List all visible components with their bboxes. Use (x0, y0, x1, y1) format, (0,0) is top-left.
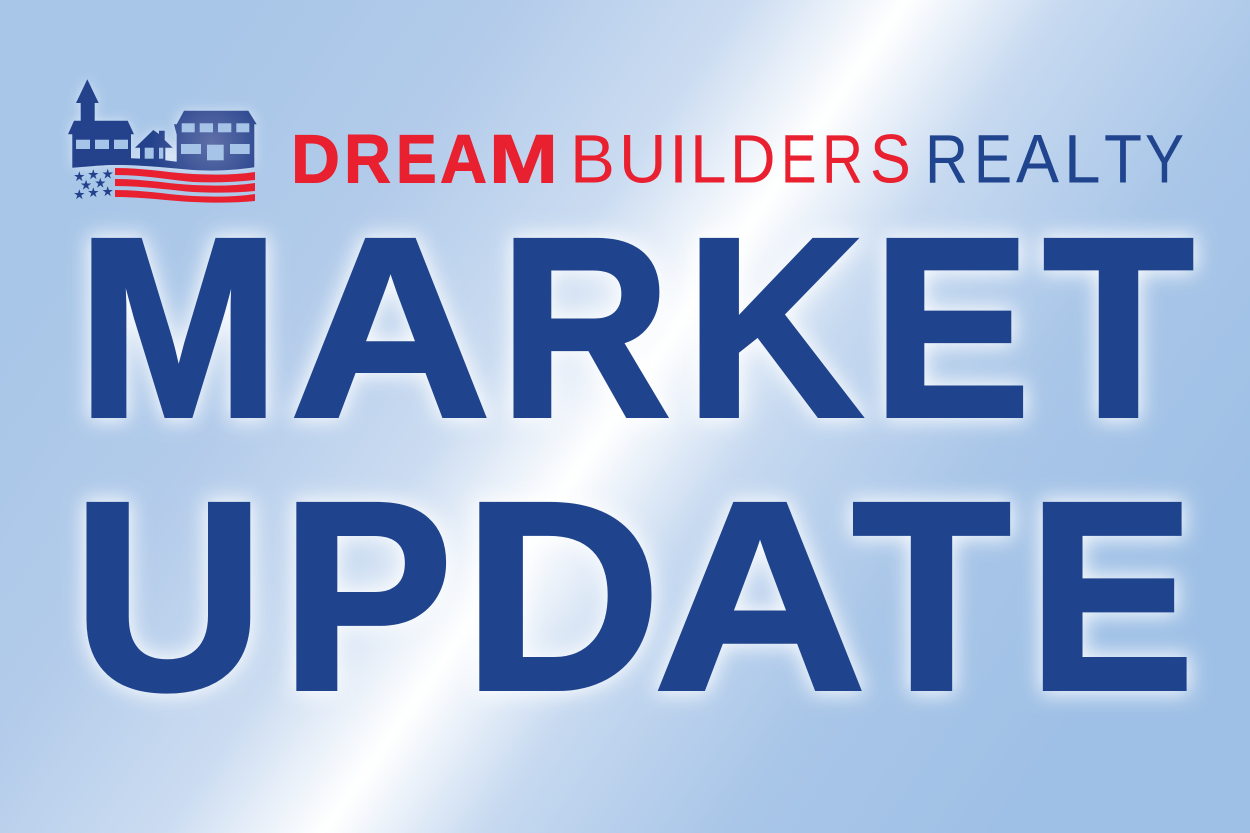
logo wordmark: DREAM: M (489, 120, 558, 198)
title: UPDATE: D (463, 446, 661, 747)
title: UPDATE: P (281, 446, 453, 747)
icon: flag stars: ★ (87, 167, 99, 183)
icon: flag stars: ★ (87, 185, 99, 201)
logo wordmark: REALTY: L (1064, 120, 1100, 198)
logo wordmark: BUILDERS: R (822, 120, 863, 198)
title: MARKET: K (685, 185, 863, 471)
logo wordmark: DREAM: D (291, 120, 340, 198)
logo: Dream Builders Realty (68, 79, 1184, 203)
title: MARKET: A (290, 185, 491, 471)
title glow: E (1028, 446, 1194, 747)
title glow: K (685, 185, 863, 471)
logo wordmark: REALTY: Y (1145, 120, 1184, 198)
title: MARKET: T (1043, 185, 1194, 471)
logo wordmark: BUILDERS: E (781, 120, 816, 198)
icon: town and flag (68, 79, 257, 203)
logo wordmark: REALTY: R (925, 120, 968, 198)
logo wordmark: BUILDERS: S (870, 120, 911, 198)
logo wordmark: BUILDERS: U (619, 120, 666, 198)
logo wordmark: DREAM: A (440, 120, 487, 198)
icon: flag stars: ★ (73, 169, 85, 185)
title: MARKET: E (872, 185, 1030, 471)
title: UPDATE: U (72, 446, 264, 747)
title glow: T (1043, 185, 1194, 471)
title: UPDATE: E (1028, 446, 1194, 747)
title: MARKET: M (77, 185, 280, 471)
logo wordmark: DREAM: E (396, 120, 437, 198)
logo wordmark: REALTY: E (974, 120, 1012, 198)
title glow: E (872, 185, 1030, 471)
icon: flag stars: ★ (102, 184, 114, 200)
icon: buildings silhouette (68, 79, 257, 171)
icon: flag stars: ★ (102, 166, 114, 182)
icon: flag stars: ★ (80, 177, 92, 193)
title glow: A (654, 446, 866, 747)
title glow: R (500, 185, 670, 471)
title glow: M (77, 185, 280, 471)
logo wordmark: BUILDERS: L (690, 120, 726, 198)
icon: flag stripes (115, 168, 255, 203)
logo wordmark: REALTY: T (1104, 120, 1142, 198)
title glow (72, 185, 1194, 747)
title glow: A (290, 185, 491, 471)
logo wordmark: BUILDERS: B (570, 120, 615, 198)
logo wordmark: BUILDERS: I (669, 120, 688, 198)
title: UPDATE: T (852, 446, 1011, 747)
title glow: U (72, 446, 264, 747)
title glow: D (463, 446, 661, 747)
title glow: P (281, 446, 453, 747)
logo wordmark: DREAM: R (344, 120, 391, 198)
icon: flag stars: ★ (73, 187, 85, 203)
title: MARKET: R (500, 185, 670, 471)
logo wordmark: BUILDERS: D (730, 120, 776, 198)
title: UPDATE: A (654, 446, 866, 747)
logo wordmark: REALTY: A (1016, 120, 1059, 198)
icon: windows (76, 123, 250, 160)
icon: flag stars: ★ (94, 176, 106, 192)
title glow: T (852, 446, 1011, 747)
